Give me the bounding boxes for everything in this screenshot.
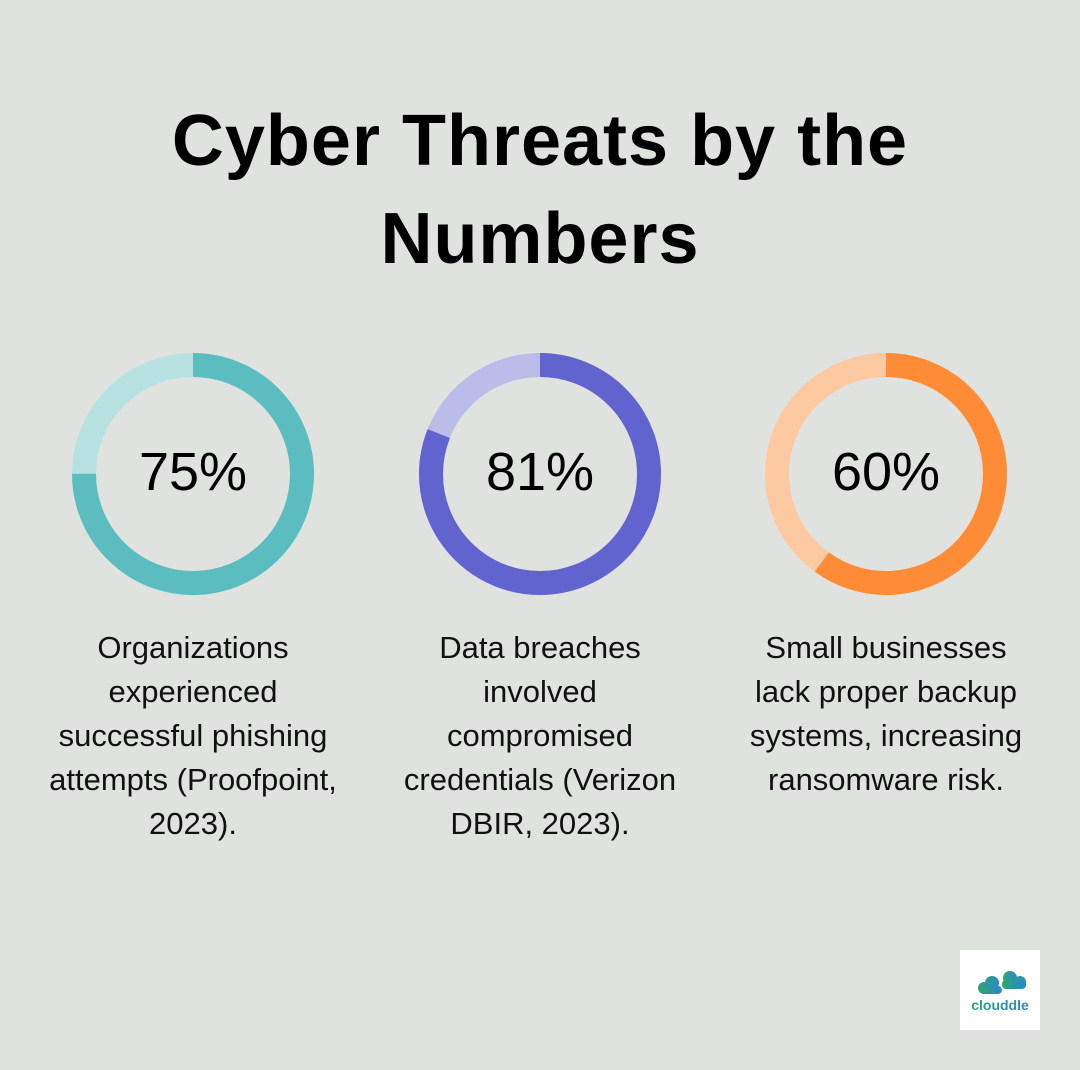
donut 81% <box>419 353 661 595</box>
description: credentials (Verizon <box>404 762 676 797</box>
description: systems, increasing <box>750 718 1022 753</box>
logo: clouddle <box>960 950 1040 1030</box>
title: Numbers <box>380 199 700 279</box>
logo: clouddle: clouddle <box>971 997 1029 1013</box>
description: DBIR, 2023). <box>450 806 630 841</box>
value: 81% <box>486 442 594 502</box>
value: 75% <box>139 442 247 502</box>
value: 60% <box>832 442 940 502</box>
title: Cyber Threats by the <box>172 101 908 181</box>
description: 2023). <box>149 806 237 841</box>
description: experienced <box>109 674 277 709</box>
description: compromised <box>447 718 633 753</box>
panel: phishing <box>49 353 337 841</box>
description <box>49 630 337 841</box>
description: successful phishing <box>59 718 327 753</box>
panel: backups <box>750 353 1022 797</box>
description: Organizations <box>97 630 289 665</box>
description <box>750 630 1022 797</box>
donut 75% <box>72 353 314 595</box>
description: attempts (Proofpoint, <box>49 762 337 797</box>
description: Small businesses <box>765 630 1007 665</box>
description: involved <box>483 674 597 709</box>
panel: breaches <box>404 353 676 841</box>
title <box>172 101 908 279</box>
description: Data breaches <box>439 630 641 665</box>
description <box>404 630 676 841</box>
description: ransomware risk. <box>768 762 1004 797</box>
description: lack proper backup <box>755 674 1017 709</box>
donut 60% <box>765 353 1007 595</box>
